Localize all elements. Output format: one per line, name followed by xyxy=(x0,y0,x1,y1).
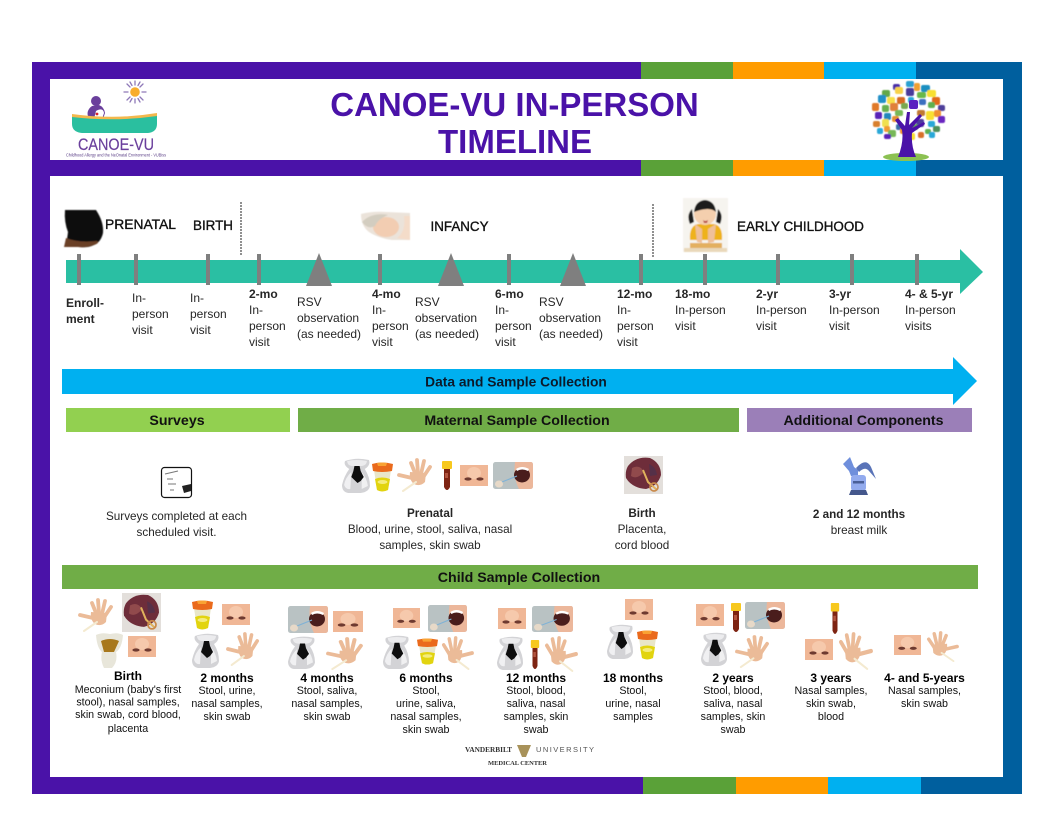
icon: sun xyxy=(124,81,146,103)
data and sample collection arrow xyxy=(62,357,977,405)
logo: Vanderbilt University Medical Center xyxy=(465,745,594,767)
icon: breast pump xyxy=(843,457,876,495)
text: 12 months: Stool, blood, xyxy=(506,685,566,697)
text: surveys note: Surveys completed at each xyxy=(106,510,247,523)
timeline markers xyxy=(77,253,919,286)
text: 2 years: swab xyxy=(721,724,746,736)
prenatal icons xyxy=(342,459,533,493)
text: 4 months: skin swab xyxy=(304,711,351,723)
text: birth: cord blood xyxy=(615,539,669,552)
label: RSV 1: observation xyxy=(297,311,359,325)
label: 18-mo: 18-mo xyxy=(675,287,710,301)
text: prenatal: Prenatal xyxy=(407,507,453,520)
label: birth visit: visit xyxy=(190,323,211,337)
text: breast milk: breast milk xyxy=(831,524,887,537)
birth icons xyxy=(80,593,161,668)
icon: pregnant woman xyxy=(64,210,103,247)
label: 2-mo: visit xyxy=(249,335,270,349)
text: 3 years: blood xyxy=(818,711,844,723)
icon: canoe xyxy=(72,113,157,133)
text: 12 months: 12 months xyxy=(506,671,566,685)
dashed divider: infancy to early childhood xyxy=(652,204,654,257)
icon: sleeping baby xyxy=(361,212,410,240)
label: 4-mo: person xyxy=(372,319,409,333)
heading: infancy: INFANCY xyxy=(430,219,488,234)
text: birth: Placenta, xyxy=(618,523,666,536)
label: 2-yr: In-person xyxy=(756,303,807,317)
label: 4-mo: visit xyxy=(372,335,393,349)
text: 2 months: 2 months xyxy=(200,671,254,685)
section header: maternal sample collection: Maternal Sample Collection xyxy=(424,413,610,429)
label: 6-mo: 6-mo xyxy=(495,287,524,301)
text: 12 months: samples, skin xyxy=(504,711,568,723)
text: 4- and 5-years: Nasal samples, xyxy=(888,685,961,697)
panel: surveys xyxy=(106,468,247,539)
text: 18 months: 18 months xyxy=(603,671,663,685)
heading: prenatal: PRENATAL xyxy=(105,217,176,232)
2 months icons xyxy=(192,600,257,668)
panel: 2 months xyxy=(191,600,263,723)
section header: maternal sample collection xyxy=(298,408,739,432)
label: 18-mo: In-person xyxy=(675,303,726,317)
icon: mother and child xyxy=(88,96,105,119)
label: 2-mo: In- xyxy=(249,303,263,317)
heading: early childhood: EARLY CHILDHOOD xyxy=(737,219,864,234)
text: 2 years: saliva, nasal xyxy=(704,698,762,710)
text: 4 months: Stool, saliva, xyxy=(297,685,357,697)
4 months icons xyxy=(288,606,363,669)
text: 2 years: samples, skin xyxy=(701,711,765,723)
text: 12 months: saliva, nasal xyxy=(507,698,565,710)
text: 2 months: Stool, urine, xyxy=(198,685,256,697)
text: 4- and 5-years: skin swab xyxy=(901,698,948,710)
label: 3-yr: 3-yr xyxy=(829,287,851,301)
2 years icons xyxy=(696,602,785,667)
section header: additional components: Additional Components xyxy=(784,413,944,429)
title: TIMELINE xyxy=(438,123,592,160)
3 years icons xyxy=(805,603,871,669)
text: breast milk: 2 and 12 months xyxy=(813,508,906,521)
panel: 4- and 5-years xyxy=(884,633,965,710)
text: 18 months: Stool, xyxy=(619,685,647,697)
heading: birth: BIRTH xyxy=(193,218,233,233)
label: birth visit: person xyxy=(190,307,227,321)
text: birth: stool), nasal samples, xyxy=(76,696,180,708)
4- and 5-years icons xyxy=(894,633,957,661)
logo: CANOE-VU xyxy=(66,81,167,158)
label: prenatal visit: In- xyxy=(132,291,146,305)
section header: child sample collection: Child Sample Collection xyxy=(438,570,600,586)
text: birth: Birth xyxy=(114,669,142,683)
label: 12-mo: 12-mo xyxy=(617,287,652,301)
label: RSV 1: (as needed) xyxy=(297,327,361,341)
title xyxy=(330,86,699,160)
section header: surveys: Surveys xyxy=(149,413,205,429)
label: 2-mo: 2-mo xyxy=(249,287,278,301)
icon: survey form xyxy=(162,468,192,498)
18 months icons xyxy=(607,599,658,660)
text: 3 years: Nasal samples, xyxy=(794,685,868,697)
panel: birth samples xyxy=(615,456,669,552)
title: CANOE-VU IN-PERSON xyxy=(330,86,699,123)
label: prenatal visit: person xyxy=(132,307,169,321)
panel: 2 years xyxy=(696,602,785,736)
text: 6 months: Stool, xyxy=(412,685,440,697)
timeline arrow xyxy=(66,249,983,294)
text: 6 months: skin swab xyxy=(403,724,450,736)
text: 2 years: 2 years xyxy=(712,671,754,685)
label: 2-yr: visit xyxy=(756,319,777,333)
label: 18-mo: visit xyxy=(675,319,696,333)
label: RSV 3: RSV xyxy=(539,295,564,309)
text: 18 months: urine, nasal xyxy=(605,698,661,710)
panel: 12 months xyxy=(497,606,576,736)
label: enrollment: Enroll- xyxy=(66,296,104,310)
text: 2 months: nasal samples, xyxy=(191,698,263,710)
label: RSV 2: RSV xyxy=(415,295,440,309)
label: 12-mo: In- xyxy=(617,303,631,317)
bottom colour band xyxy=(37,777,1022,794)
icon: puzzle tree xyxy=(872,81,945,161)
label: prenatal visit: visit xyxy=(132,323,153,337)
text: 6 months: nasal samples, xyxy=(390,711,462,723)
text: 6 months: 6 months xyxy=(399,671,453,685)
logo wordmark: CANOE-VU xyxy=(78,135,154,154)
panel: 3 years xyxy=(794,603,871,723)
icon: smiling girl xyxy=(683,198,728,252)
label: 4-mo: In- xyxy=(372,303,386,317)
text: 18 months: samples xyxy=(613,711,653,723)
timeline labels xyxy=(66,287,956,349)
text: 6 months: urine, saliva, xyxy=(396,698,456,710)
label: birth visit: In- xyxy=(190,291,204,305)
section header: child sample collection xyxy=(62,565,978,589)
panel: prenatal samples xyxy=(342,459,533,552)
text: 4- and 5-years: 4- and 5-years xyxy=(884,671,965,685)
text: prenatal: Blood, urine, stool, saliva, nasal xyxy=(348,523,512,536)
label: RSV 2: (as needed) xyxy=(415,327,479,341)
label: 12-mo: person xyxy=(617,319,654,333)
label: RSV 3: observation xyxy=(539,311,601,325)
logo: Vanderbilt University Medical Center: MEDICAL CENTER xyxy=(488,760,547,767)
text: 2 months: skin swab xyxy=(204,711,251,723)
text: prenatal: samples, skin swab xyxy=(379,539,481,552)
panel: child birth xyxy=(75,593,181,735)
text: 4 months: 4 months xyxy=(300,671,354,685)
text: 12 months: swab xyxy=(524,724,549,736)
data and sample collection arrow: Data and Sample Collection xyxy=(425,374,607,390)
label: 12-mo: visit xyxy=(617,335,638,349)
section header: additional components xyxy=(747,408,972,432)
text: birth: Birth xyxy=(628,507,656,520)
text: 4 months: nasal samples, xyxy=(291,698,363,710)
label: 4- and 5-yr: In-person xyxy=(905,303,956,317)
text: birth: skin swab, cord blood, xyxy=(75,709,181,721)
label: 4- and 5-yr: visits xyxy=(905,319,932,333)
label: 4- and 5-yr: 4- & 5-yr xyxy=(905,287,953,301)
label: RSV 3: (as needed) xyxy=(539,327,603,341)
top colour band xyxy=(32,62,1022,79)
dashed divider: birth to infancy xyxy=(240,202,242,255)
logo: Vanderbilt University Medical Center: UNIVERSITY xyxy=(536,745,594,754)
label: RSV 2: observation xyxy=(415,311,477,325)
12 months icons xyxy=(497,606,576,671)
text: 3 years: 3 years xyxy=(810,671,852,685)
panel: breast milk xyxy=(813,457,906,537)
label: RSV 1: RSV xyxy=(297,295,322,309)
text: 2 years: Stool, blood, xyxy=(703,685,763,697)
text: birth: Meconium (baby's first xyxy=(75,684,181,696)
section header: surveys xyxy=(66,408,290,432)
label: 3-yr: In-person xyxy=(829,303,880,317)
text: surveys note: scheduled visit. xyxy=(137,526,216,539)
icon: placenta xyxy=(624,456,663,494)
panel: 4 months xyxy=(288,606,363,723)
text: birth: placenta xyxy=(108,723,148,735)
label: 2-yr: 2-yr xyxy=(756,287,778,301)
label: 4-mo: 4-mo xyxy=(372,287,401,301)
text: 3 years: skin swab, xyxy=(806,698,856,710)
6 months icons xyxy=(383,605,472,669)
panel: 6 months xyxy=(383,605,472,736)
label: 6-mo: visit xyxy=(495,335,516,349)
label: 2-mo: person xyxy=(249,319,286,333)
label: 6-mo: In- xyxy=(495,303,509,317)
label: enrollment: ment xyxy=(66,312,95,326)
logo tagline: Childhood Allergy and the NeOnatal Environment - VUBiss xyxy=(66,152,167,158)
logo: Vanderbilt University Medical Center: VANDERBILT xyxy=(465,745,512,754)
label: 3-yr: visit xyxy=(829,319,850,333)
label: 6-mo: person xyxy=(495,319,532,333)
panel: 18 months xyxy=(603,599,663,723)
middle colour band xyxy=(50,160,1003,176)
